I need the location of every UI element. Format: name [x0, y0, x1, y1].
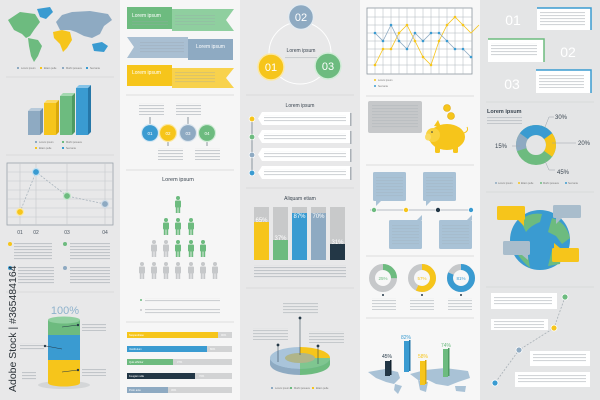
progress bars: 90% — [221, 333, 227, 337]
watermark text: Adobe Stock | #365484164 — [7, 265, 19, 392]
heading: Lorem ipsum (donut): Lorem ipsum — [487, 109, 522, 115]
legend: people — [140, 298, 220, 315]
horizontal timeline with callout boxes — [370, 172, 474, 249]
process circles 01-04: 04 — [204, 131, 210, 136]
legend: bar chart: Lorem ipsum — [39, 141, 53, 144]
legend: world map — [17, 67, 101, 70]
legend: world map: Etiam pelle — [44, 67, 57, 70]
legend: ring: Lorem ipsum — [275, 387, 289, 390]
heading: 100%: 100% — [51, 305, 79, 317]
numbered steps 01-03 — [488, 8, 591, 93]
numbered steps 01-03: 01 — [505, 12, 521, 28]
legend: grid chart — [374, 79, 392, 88]
heading: Aliquam etiam: Aliquam etiam — [284, 196, 316, 202]
3D ring chart with callouts — [253, 303, 344, 375]
progress bars: Quis efficitur — [129, 360, 144, 364]
ribbon: green — [127, 7, 234, 31]
donut percentages — [372, 267, 472, 310]
diagonal timeline — [491, 293, 590, 387]
legend: donut: Sed ante — [568, 182, 579, 185]
text blocks with bullets — [8, 242, 110, 284]
progress bars: Proin ante — [129, 388, 141, 392]
numbered steps 01-03: 02 — [560, 44, 576, 60]
progress bars: 80% — [210, 347, 216, 351]
legend: ring: Etiam pelle — [316, 387, 329, 390]
process circles 01-04: 03 — [185, 131, 191, 136]
legend: grid chart: Sed ante — [378, 85, 389, 88]
cycle diagram: Lorem ipsum — [287, 48, 315, 54]
donut chart — [495, 115, 591, 176]
process circles 01-04 — [139, 103, 220, 160]
column percentage chart — [254, 207, 345, 260]
people pyramid — [139, 196, 218, 279]
legend: bar chart — [35, 141, 83, 150]
map with 3D bars: 58% — [418, 354, 429, 360]
heading: Lorem ipsum (people): Lorem ipsum — [162, 177, 194, 183]
vertical timeline cards — [249, 112, 352, 180]
progress bars: Suspendisse — [129, 333, 144, 337]
cycle diagram — [258, 4, 341, 84]
ribbon: blue-gray: Lorem ipsum — [196, 44, 225, 50]
donut percentages: 81% — [456, 276, 466, 281]
heading: Lorem ipsum (timeline): Lorem ipsum — [286, 103, 314, 109]
progress bars: 37% — [177, 360, 183, 364]
ribbon: blue-gray — [127, 37, 233, 60]
line chart: 04 — [102, 230, 108, 236]
progress bars — [127, 332, 232, 393]
legend: world map: Lorem ipsum — [21, 67, 35, 70]
donut chart: 45% — [557, 170, 570, 176]
map with 3D bars: 82% — [401, 335, 412, 341]
legend: world map: Morbi posuere — [66, 67, 83, 70]
legend: ring — [271, 387, 329, 390]
ribbon: green: Lorem ipsum — [132, 13, 161, 19]
panel: world map — [8, 7, 112, 62]
legend: ring: Morbi posuere — [294, 387, 311, 390]
line chart: 03 — [64, 230, 70, 236]
globe with speech bubbles — [497, 205, 581, 270]
bar chart 3D — [28, 85, 91, 135]
column percentage chart: 70% — [312, 214, 325, 220]
legend: donut: Morbi posuere — [543, 182, 560, 185]
column percentage chart: 37% — [274, 236, 287, 242]
ribbon: yellow: Lorem ipsum — [132, 70, 161, 76]
cycle diagram: 01 — [265, 62, 277, 74]
progress bars: 70% — [199, 374, 205, 378]
grid line chart — [367, 8, 479, 74]
numbered steps 01-03: 03 — [504, 76, 520, 92]
cycle diagram: 03 — [322, 61, 334, 73]
map with 3D bars: 74% — [441, 343, 452, 349]
cycle diagram: 02 — [295, 12, 307, 24]
donut chart: 20% — [578, 141, 591, 147]
progress bars: Feugiat nulla — [129, 374, 144, 378]
line chart: 02 — [33, 230, 39, 236]
donut chart: 30% — [555, 115, 568, 121]
donut percentages: 25% — [378, 276, 388, 281]
process circles 01-04: 02 — [165, 131, 171, 136]
line chart: 01 — [17, 230, 23, 236]
donut percentages: 57% — [417, 276, 427, 281]
gray text box — [368, 101, 422, 133]
legend: donut — [495, 182, 579, 185]
process circles 01-04: 01 — [147, 131, 153, 136]
cylinder chart — [20, 316, 106, 389]
progress bars: Vestibulum — [129, 347, 142, 351]
donut chart: 15% — [495, 144, 508, 150]
legend: grid chart: Lorem ipsum — [378, 79, 392, 82]
column percentage chart: 31% — [331, 240, 344, 246]
line chart — [7, 163, 113, 236]
column percentage chart: 87% — [293, 214, 306, 220]
legend: bar chart: Sed ante — [66, 147, 77, 150]
map with 3D bars: 45% — [382, 354, 393, 360]
legend: bar chart: Etiam pelle — [39, 147, 52, 150]
legend: bar chart: Morbi posuere — [66, 141, 83, 144]
legend: donut: Etiam pelle — [521, 182, 534, 185]
legend: world map: Sed ante — [90, 67, 101, 70]
progress bars: 36% — [171, 388, 177, 392]
map with 3D bars — [368, 335, 470, 394]
column percentage chart: 65% — [255, 218, 268, 224]
legend: donut: Lorem ipsum — [498, 182, 512, 185]
ribbon: yellow — [127, 65, 234, 88]
icon: piggy bank — [425, 104, 468, 153]
